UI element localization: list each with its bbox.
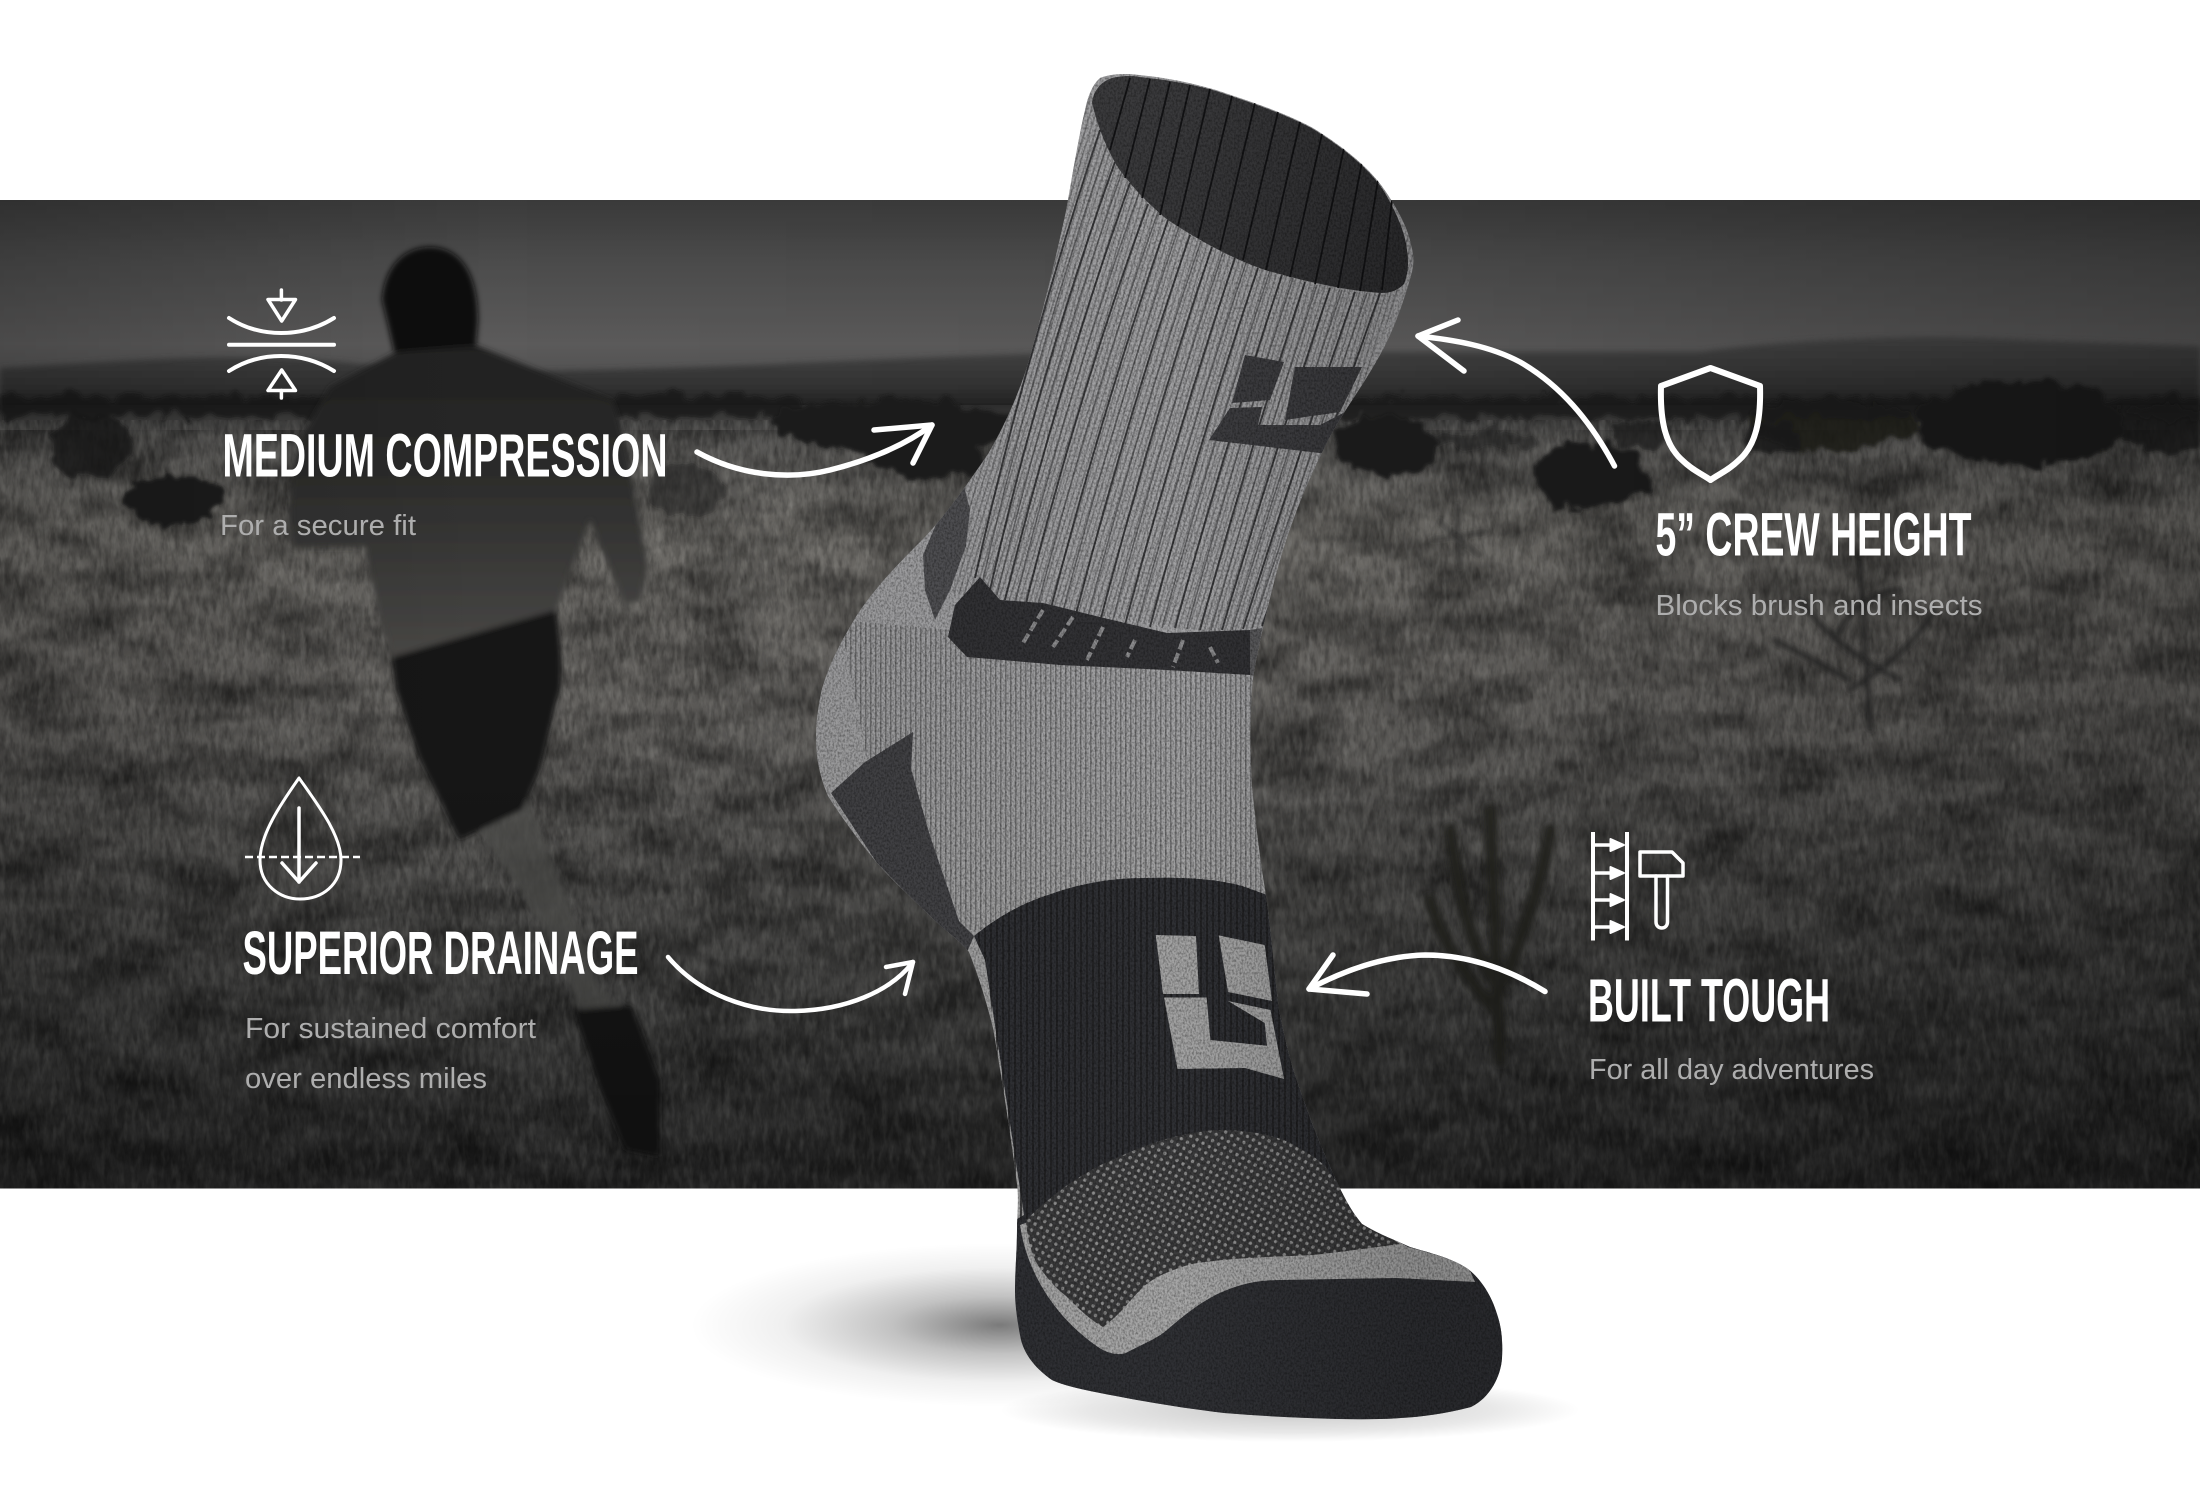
opening inner rib lines [1110, 78, 1392, 291]
runner legs [480, 785, 632, 1030]
cuff rib lines [975, 130, 1380, 630]
runner shoe [574, 1005, 660, 1157]
description: Blocks brush and insects [1656, 590, 1982, 622]
photo vignette [0, 200, 2200, 1190]
brand band around ankle [948, 577, 1250, 675]
sock base knit [800, 60, 1520, 1440]
distant mountains [0, 336, 2200, 405]
runner shorts [392, 610, 561, 840]
feature: medium compression [220, 290, 668, 542]
midfoot dark panel [974, 878, 1520, 1430]
mesh vent panel [1026, 1130, 1400, 1327]
description: For all day adventures [1589, 1054, 1874, 1086]
sock ground shadow [690, 1243, 1580, 1442]
feature: built tough [1588, 832, 1874, 1086]
arrow: built tough to foot [1309, 955, 1545, 994]
runner silhouette [290, 247, 660, 1157]
calf mottled pattern [923, 477, 970, 620]
sock opening interior [1092, 76, 1408, 293]
light toe band [1020, 1200, 1475, 1354]
runner head [382, 247, 478, 352]
knit texture overlay [800, 60, 1520, 1440]
foot logo [1156, 935, 1284, 1079]
icon: hammer and arrows [1593, 832, 1683, 940]
feature: superior drainage [242, 778, 638, 1095]
icon: compression [229, 290, 334, 398]
feature: crew height [1656, 368, 1982, 622]
icon: shield [1661, 368, 1760, 480]
fine grass streaks [0, 420, 2200, 1190]
edge shading [800, 60, 1520, 1440]
description: For a secure fit [220, 510, 416, 542]
heading: SUPERIOR DRAINAGE [242, 919, 638, 987]
soft dark blotches in grass [0, 430, 2200, 1190]
arrow: compression to sock [697, 425, 932, 475]
band letter gaps [1023, 610, 1218, 667]
arrow: drainage to sock [668, 957, 913, 1011]
upper logo on cuff [1209, 355, 1362, 454]
midfoot ribbing [974, 878, 1340, 1220]
cuff fine ribbing [930, 80, 1420, 640]
description [245, 1013, 536, 1095]
heading: 5” CREW HEIGHT [1656, 500, 1972, 568]
runner shirt [290, 343, 648, 657]
sock [800, 60, 1520, 1440]
icon: drainage drop [245, 778, 360, 899]
secondary cuff rib lines [982, 146, 1367, 630]
ankle knit [840, 620, 1280, 930]
heading: MEDIUM COMPRESSION [222, 422, 668, 490]
heading: BUILT TOUGH [1588, 966, 1830, 1034]
band end stripe [1250, 628, 1262, 676]
photo background band with runner in field [0, 200, 2200, 1195]
heel dark wedge [831, 732, 974, 952]
sky [0, 200, 2200, 410]
cactus silhouettes [1430, 505, 1935, 1060]
description: over endless miles [245, 1063, 487, 1095]
field [0, 405, 2200, 1195]
description: For sustained comfort [245, 1013, 536, 1045]
arrow: crew height to cuff [1418, 320, 1614, 466]
treeline and bushes [0, 381, 2200, 524]
